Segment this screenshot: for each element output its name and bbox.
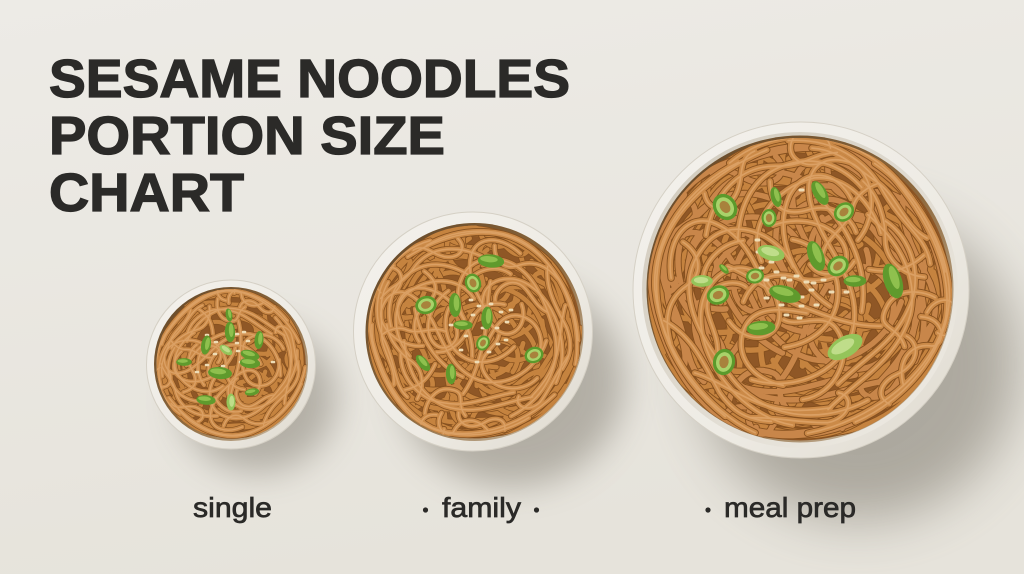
bowl: single: [131, 264, 336, 472]
sesame seeds: meal prep: [756, 190, 848, 318]
title: CHART: [49, 163, 244, 223]
title: PORTION SIZE: [49, 106, 445, 166]
bowl: family: [333, 191, 624, 486]
sesame seeds: single: [196, 332, 274, 372]
label: meal prep: meal prep: [724, 492, 856, 523]
scallions: meal prep: [691, 178, 907, 377]
label: single: single: [193, 492, 272, 523]
scallions: single: [176, 308, 264, 410]
scallions: family: [413, 253, 546, 384]
title: [49, 49, 570, 223]
title: SESAME NOODLES: [49, 49, 570, 109]
label: family: family: [442, 492, 521, 523]
label: family: [423, 492, 539, 523]
bowl: meal prep: [599, 89, 1018, 520]
sesame seeds: family: [450, 300, 512, 362]
